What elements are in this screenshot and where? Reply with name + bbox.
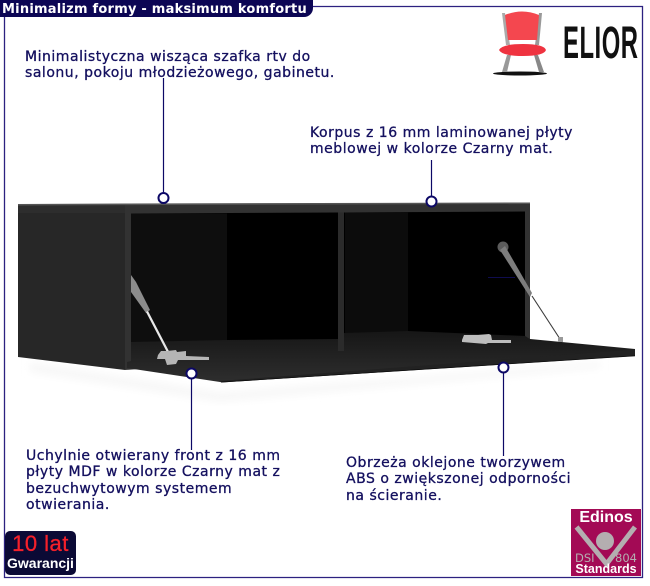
text: front description: płyty MDF w kolorze Czarny mat z bbox=[26, 464, 280, 480]
title bar: Minimalizm formy - maksimum komfortu bbox=[2, 2, 307, 17]
badge code right: 804 bbox=[615, 551, 637, 565]
flap front edge bbox=[220, 350, 635, 382]
text: edges description: Obrzeża oklejone tworzywem bbox=[346, 455, 566, 471]
left gas strut bbox=[131, 275, 150, 313]
logo: Elior bbox=[493, 12, 639, 76]
text: body description bbox=[310, 125, 573, 157]
badge number: 10 lat bbox=[12, 531, 69, 556]
text: wall cabinet description: salonu, pokoju młodzieżowego, gabinetu. bbox=[25, 65, 335, 81]
divider bbox=[338, 212, 344, 351]
right gas strut bbox=[498, 242, 508, 252]
text: wall cabinet description: Minimalistyczna wisząca szafka rtv do bbox=[25, 49, 311, 65]
text: front description: Uchylnie otwierany front z 16 mm bbox=[26, 448, 281, 464]
badge caption: Gwarancji bbox=[7, 555, 74, 571]
marker: top left bbox=[158, 78, 168, 203]
marker: top right bbox=[426, 160, 436, 206]
text: wall cabinet description bbox=[25, 49, 335, 81]
side panel bbox=[18, 204, 125, 370]
faint blue line bbox=[488, 276, 515, 278]
icon: red chair bbox=[493, 12, 547, 76]
marker: bottom left bbox=[186, 368, 196, 450]
marker: bottom right bbox=[498, 362, 508, 456]
open flap bbox=[127, 331, 635, 382]
badge caption: Standards bbox=[575, 562, 637, 576]
text: front description: otwierania. bbox=[26, 497, 110, 513]
badge brand: Edinos bbox=[579, 509, 633, 526]
shadow under cabinet bbox=[30, 362, 600, 402]
text: body description: meblowej w kolorze Czarny mat. bbox=[310, 141, 553, 157]
left hinge bbox=[157, 350, 209, 365]
text: edges description: na ścieranie. bbox=[346, 488, 442, 504]
badge code left: DSI bbox=[575, 551, 595, 565]
text: body description: Korpus z 16 mm laminowanej płyty bbox=[310, 125, 573, 141]
front frame bbox=[125, 203, 530, 370]
interior bbox=[131, 212, 338, 364]
logo wordmark: ELIOR bbox=[563, 17, 639, 68]
text: edges description: ABS o zwiększonej odporności bbox=[346, 471, 571, 487]
text: front description: bezuchwytowym systemem bbox=[26, 481, 232, 497]
text: front description bbox=[26, 448, 281, 513]
back wall lighter panels bbox=[131, 214, 227, 342]
badge: Edinos standards bbox=[571, 509, 641, 576]
right hinge bbox=[462, 334, 511, 344]
text: edges description bbox=[346, 455, 571, 504]
badge: 10 years warranty bbox=[5, 531, 76, 575]
